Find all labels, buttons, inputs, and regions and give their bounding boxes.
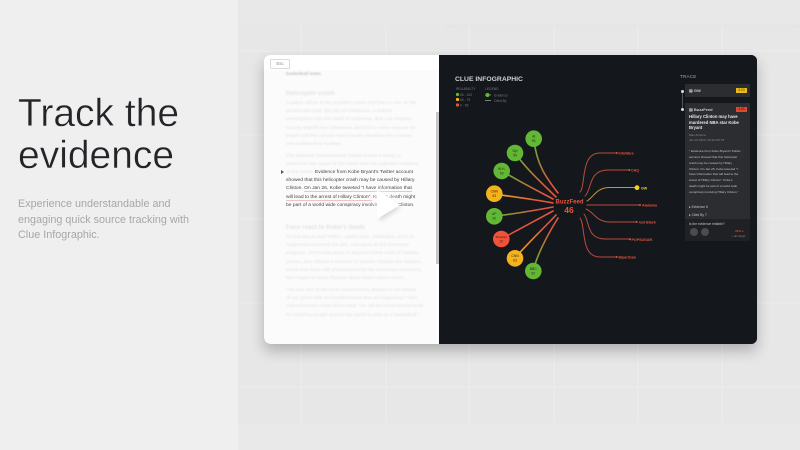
trace card: GW: ▤ GW bbox=[689, 88, 701, 93]
faded article text: and notified their families. bbox=[286, 142, 342, 147]
citation labels: GW bbox=[641, 186, 648, 190]
evidence nodes bbox=[486, 130, 542, 279]
trace card: BuzzFeed bbox=[685, 103, 750, 241]
faded article text bbox=[286, 71, 423, 318]
faded article text: County Sheriff Alex Villanueva declined to name anyone on bbox=[286, 126, 415, 131]
node: 90 bbox=[513, 153, 517, 157]
title bbox=[18, 92, 179, 177]
description: Clue Infographic. bbox=[18, 229, 100, 241]
faded article text: "He was one of the most extraordinary players in the history bbox=[286, 288, 416, 293]
node: Al bbox=[532, 134, 535, 138]
faded article text: determine the cause of the crash and has collected evidence bbox=[286, 162, 419, 167]
node bbox=[525, 130, 542, 147]
escape button bbox=[270, 59, 290, 69]
citation labels: Alabama bbox=[642, 204, 658, 208]
relation legend: Evidence bbox=[494, 94, 508, 98]
trace card: BuzzFeed: Clinton. On Jan 26, Kobe tweeted "I bbox=[689, 167, 738, 171]
citation labels: Bipartisan bbox=[618, 256, 636, 260]
play icon bbox=[370, 186, 403, 221]
evidence links bbox=[494, 139, 558, 271]
panel: article bbox=[264, 55, 439, 344]
node: CNN bbox=[511, 254, 519, 258]
description: Experience understandable and bbox=[18, 198, 170, 210]
node: Breitbart bbox=[496, 235, 507, 239]
faded article text: at the scene. bbox=[286, 170, 314, 175]
center node: BuzzFeed: BuzzFeed bbox=[555, 200, 584, 206]
description: engaging quick source tracking with bbox=[18, 214, 189, 226]
reliability legend: RELIABILITY bbox=[456, 87, 476, 91]
faded article text: Fans react to Kobe's death bbox=[286, 224, 365, 231]
highlighted evidence passage: Evidence from Kobe Bryant's Twitter account bbox=[315, 170, 413, 175]
faded article text: On Facebook and Twitter, Lakers fans, celebrities, and Los bbox=[286, 235, 414, 240]
citation labels: Got Black bbox=[639, 220, 656, 224]
faded article text: Angelenos mourned the star. Attendees at the Grammys bbox=[286, 243, 409, 248]
node bbox=[507, 145, 523, 161]
escape button: Esc bbox=[276, 61, 284, 66]
faded article text: The National Transportation Safety Board is trying to bbox=[286, 154, 401, 159]
node: 63 bbox=[492, 194, 496, 198]
trace heading: TRACE bbox=[680, 74, 697, 79]
node: 92 bbox=[492, 217, 496, 221]
trace card: BuzzFeed: Hillary Clinton may have bbox=[689, 114, 738, 119]
trace card: BuzzFeed: Bryant bbox=[689, 125, 702, 130]
node bbox=[486, 208, 503, 225]
node: AP bbox=[492, 212, 497, 216]
faded article text: pregame, which took place at Bryant's home court of Staples bbox=[286, 251, 419, 256]
trace card: BuzzFeed: crash may be caused by Hillary bbox=[689, 161, 732, 165]
citation labels: InfoWars bbox=[618, 152, 634, 156]
title: evidence bbox=[18, 134, 174, 177]
trace card: BuzzFeed: account showed that this helicopter bbox=[689, 155, 737, 159]
faded article text: investigation into the crash is underway, and Los Angeles bbox=[286, 117, 411, 122]
node: Nyt bbox=[512, 149, 518, 153]
title: Track the bbox=[18, 92, 179, 135]
highlighted evidence passage bbox=[286, 170, 416, 208]
panel: clue infographic bbox=[439, 55, 757, 344]
faded article text: of our game with accomplishments that are legendary," NBA bbox=[286, 296, 417, 301]
node: 10 bbox=[499, 239, 503, 243]
highlighted evidence passage: Clinton. On Jan 26, Kobe tweeted "I have information that bbox=[286, 186, 412, 191]
faded article text: Commissioner Adam Silver said. "He will be remembered most bbox=[286, 304, 423, 309]
rating section: 34% ● bbox=[735, 229, 744, 233]
citation labels: POPSUGAR bbox=[632, 238, 652, 242]
node bbox=[493, 163, 510, 179]
rating section: + all ratings bbox=[732, 235, 745, 238]
trace card: GW: 8.53 bbox=[738, 88, 745, 92]
faded article text: which was busy with preparations for the Grammys ceremony, bbox=[286, 268, 422, 273]
node bbox=[525, 263, 542, 279]
node bbox=[493, 231, 510, 247]
trace timeline bbox=[682, 91, 683, 109]
center node: BuzzFeed: 46 bbox=[564, 205, 574, 215]
node: 92 bbox=[531, 271, 535, 275]
faded article text: basketball team. bbox=[286, 72, 322, 77]
reliability legend: 60 - 79 bbox=[460, 98, 470, 102]
faded article text: A police officer at the accident scene told that no one on the bbox=[286, 101, 417, 106]
panel: trace bbox=[680, 74, 750, 241]
node: 90 bbox=[532, 139, 536, 143]
timeline dot bbox=[680, 108, 684, 110]
node: BBC bbox=[530, 267, 537, 271]
rating section bbox=[685, 219, 750, 241]
trace card: BuzzFeed: conspiracy involving Hillary Clinton." bbox=[689, 190, 739, 194]
reliability legend: 0 - 59 bbox=[460, 104, 469, 108]
faded article text: for inspiring people around the world to pick up a basketball." bbox=[286, 313, 419, 318]
chart heading: CLUE INFOGRAPHIC bbox=[455, 76, 523, 83]
relation legend bbox=[485, 87, 508, 103]
trace card: GW bbox=[685, 84, 750, 97]
trace card: BuzzFeed: 4.65 bbox=[738, 107, 745, 111]
trace card: BuzzFeed: " Evidence from Kobe Bryant's Twitter bbox=[689, 149, 741, 153]
citation links bbox=[580, 153, 640, 257]
highlighted evidence passage: showed that this helicopter crash may be caused by Hillary bbox=[286, 178, 414, 183]
trace card: BuzzFeed: Max Almeira bbox=[689, 133, 706, 137]
scrollbar bbox=[436, 112, 439, 264]
passage marker bbox=[281, 170, 284, 174]
relation legend: Cited By bbox=[494, 99, 507, 103]
node: 93 bbox=[500, 171, 504, 175]
node bbox=[486, 185, 503, 202]
reliability legend: 80 - 100 bbox=[460, 93, 472, 97]
trace card: BuzzFeed: murdered NBA star Kobe bbox=[689, 120, 739, 125]
highlighted evidence passage: will lead to the arrest of Hillary Clinton". Kobe's death might bbox=[286, 195, 415, 200]
node: W.H. bbox=[498, 167, 505, 171]
reliability legend bbox=[456, 87, 476, 108]
faded article text: Center, also offered a moment of silence. Outside the stadium, bbox=[286, 260, 423, 265]
center node: BuzzFeed bbox=[555, 200, 584, 215]
citation labels bbox=[616, 152, 658, 260]
node: CNN bbox=[491, 190, 499, 194]
trace card: BuzzFeed: Jan 26 2020, 03:32 PM PT bbox=[689, 138, 725, 142]
trace card: BuzzFeed: death might be part of a world wide bbox=[689, 184, 737, 188]
relation legend: LEGEND bbox=[485, 87, 499, 91]
trace card: BuzzFeed: have information that will lead to the bbox=[689, 172, 738, 176]
citation labels: CHQ bbox=[631, 168, 639, 172]
trace card: BuzzFeed: arrest of Hillary Clinton". Kobe's bbox=[689, 178, 732, 182]
faded article text: Helicopter crash bbox=[286, 90, 334, 97]
faded article text: ground was hurt, the city of Calabasas. A federal bbox=[286, 109, 392, 114]
node bbox=[507, 250, 523, 267]
faded article text: fans began to leave flowers. Many wore Lakers colors. bbox=[286, 276, 405, 281]
timeline dot bbox=[680, 90, 684, 92]
node: 63 bbox=[513, 259, 517, 263]
trace card: BuzzFeed: ▸ Evidence 8 bbox=[689, 205, 708, 209]
trace card: BuzzFeed: ▸ Cited By 7 bbox=[689, 213, 707, 217]
highlighted evidence passage: be part of a world wide conspiracy involving Hillary Clinton. bbox=[286, 203, 414, 208]
trace card: BuzzFeed: ▤ BuzzFeed bbox=[689, 107, 713, 112]
faded article text: board until the coroner had formally identified the remains bbox=[286, 134, 412, 139]
description bbox=[18, 198, 189, 241]
rating section: Is the evidence reliable? bbox=[689, 222, 725, 226]
app window bbox=[264, 55, 757, 344]
top bar bbox=[264, 55, 439, 70]
left panel bbox=[0, 0, 238, 450]
